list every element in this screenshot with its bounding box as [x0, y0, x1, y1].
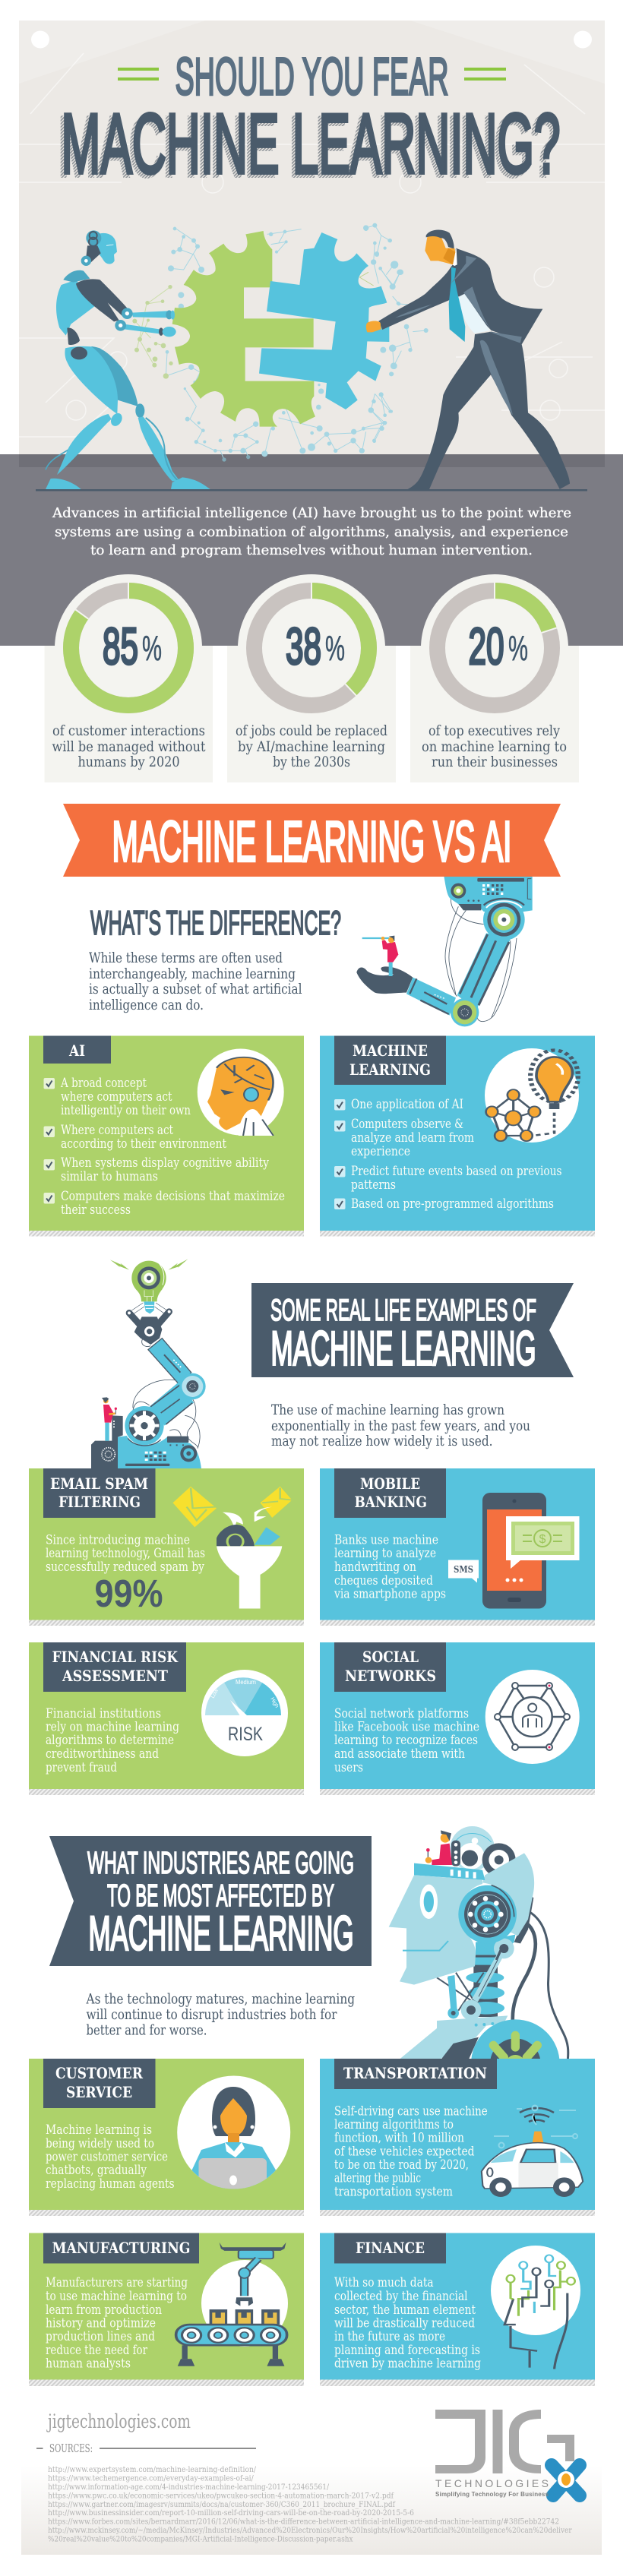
- finance text: will be drastically reduced: [334, 2315, 475, 2331]
- machine learning tab heading: [334, 1036, 446, 1085]
- ribbon heading: industries: WHAT INDUSTRIES ARE GOING: [87, 1845, 354, 1880]
- caption 38 percent: [236, 723, 387, 770]
- blue gear half: [259, 232, 389, 409]
- icon: robotic conveyor: [176, 2243, 288, 2366]
- icon: risk gauge: Low: [210, 1688, 220, 1699]
- manufacturing tab heading: [43, 2233, 199, 2264]
- stat card 38 percent: [227, 574, 396, 782]
- customer service tab heading: SERVICE: [66, 2083, 132, 2101]
- transportation text: Self-driving cars use machine: [334, 2104, 488, 2119]
- caption 85 percent: will be managed without: [52, 739, 206, 755]
- transportation tab heading: TRANSPORTATION: [343, 2064, 487, 2082]
- panel: manufacturing: [29, 2233, 304, 2386]
- caption 20 percent: on machine learning to: [422, 739, 567, 755]
- businessman pushing gear: [359, 223, 570, 489]
- AI checklist: A broad concept: [60, 1076, 147, 1090]
- sources heading: SOURCES:: [49, 2442, 93, 2455]
- icon: self-driving car: [482, 2106, 583, 2197]
- industries paragraph: will continue to disrupt industries both for: [87, 2007, 337, 2023]
- machine learning checklist: experience: [351, 1144, 410, 1158]
- panel: finance: [320, 2233, 595, 2386]
- intro text: [52, 505, 571, 558]
- finance text: collected by the financial: [334, 2289, 468, 2303]
- email spam tab heading: [43, 1468, 155, 1518]
- JIG Technologies logo: [435, 2410, 580, 2498]
- caption 38 percent: by AI/machine learning: [238, 739, 385, 755]
- transportation text: [334, 2104, 488, 2198]
- machine learning checklist: Computers observe &: [351, 1117, 463, 1131]
- machine learning checklist: One application of AI: [351, 1097, 463, 1111]
- panel: social networks: [320, 1642, 595, 1795]
- neural network decoration left: [132, 227, 403, 462]
- stat card 85 percent: [44, 574, 213, 782]
- sources list: http://www.businessinsider.com/report-10-million-self-driving-cars-will-be-on-the-road-by-2020-2015-5-6: [48, 2508, 414, 2518]
- caption 38 percent: of jobs could be replaced: [236, 723, 387, 739]
- intro text: to learn and program themselves without human intervention.: [90, 542, 533, 558]
- panel: customer service: [29, 2059, 304, 2216]
- financial risk tab heading: FINANCIAL RISK: [52, 1648, 179, 1666]
- caption 20 percent: [422, 723, 567, 770]
- machine learning checklist: Based on pre-programmed algorithms: [351, 1196, 554, 1211]
- social networks text: and associate them with: [334, 1746, 465, 1761]
- manufacturing text: [46, 2275, 188, 2371]
- machine learning checklist: analyze and learn from: [351, 1130, 474, 1145]
- AI checklist: When systems display cognitive ability: [61, 1155, 270, 1170]
- ribbon heading: industries: [49, 1836, 372, 1966]
- intro text: systems are using a combination of algorithms, analysis, and experience: [55, 524, 568, 540]
- manufacturing text: to use machine learning to: [46, 2289, 187, 2303]
- panel: machine learning: [320, 1036, 595, 1237]
- social networks tab heading: NETWORKS: [345, 1667, 436, 1685]
- manufacturing text: production lines and: [46, 2329, 155, 2344]
- email spam text: [46, 1533, 205, 1574]
- sources list: [48, 2465, 572, 2544]
- financial risk text: creditworthiness and: [46, 1746, 159, 1761]
- icon: risk gauge: [201, 1670, 288, 1756]
- sources list: https://www.pwc.co.uk/economic-services/ukeo/pwcukeo-section-4-automation-march-2017-v2.pdf: [48, 2492, 394, 2501]
- value 20 percent: 20: [468, 618, 504, 675]
- ribbon heading: real life examples: [251, 1283, 574, 1377]
- social networks text: [334, 1706, 479, 1775]
- customer service text: power customer service: [46, 2150, 168, 2164]
- caption 85 percent: humans by 2020: [77, 754, 179, 770]
- manufacturing text: reduce the need for: [46, 2343, 147, 2357]
- value 85 percent: %: [142, 628, 162, 668]
- mobile banking text: learning to analyze: [334, 1546, 436, 1560]
- difference paragraph: While these terms are often used: [89, 950, 283, 966]
- customer service text: replacing human agents: [46, 2176, 175, 2191]
- financial risk text: algorithms to determine: [46, 1733, 174, 1747]
- title decoration right: [464, 68, 506, 81]
- mobile banking text: handwriting on: [334, 1560, 416, 1574]
- transportation text: transportation system: [334, 2185, 453, 2198]
- social networks tab heading: SOCIAL: [362, 1648, 419, 1666]
- AI checklist: similar to humans: [61, 1169, 158, 1184]
- email spam tab heading: EMAIL SPAM: [50, 1474, 148, 1493]
- value 85 percent: 85: [103, 618, 138, 675]
- sources list: http://www.expertsystem.com/machine-learning-definition/: [48, 2465, 256, 2474]
- grey intro band: [0, 454, 623, 646]
- mobile banking tab heading: BANKING: [354, 1493, 427, 1511]
- AI tab heading: AI: [68, 1041, 85, 1060]
- financial risk tab heading: [43, 1642, 186, 1692]
- finance text: planning and forecasting is: [334, 2343, 480, 2357]
- finance text: in the future as more: [334, 2329, 445, 2344]
- hero panel: [19, 21, 605, 469]
- panel: mobile banking: [320, 1468, 595, 1626]
- examples paragraph: The use of machine learning has grown: [271, 1402, 504, 1418]
- caption 20 percent: of top executives rely: [429, 723, 560, 739]
- title: [58, 47, 561, 194]
- AI checklist: intelligently on their own: [61, 1103, 191, 1117]
- title decoration left: [118, 68, 159, 81]
- manufacturing text: history and optimize: [46, 2315, 156, 2331]
- mobile banking text: via smartphone apps: [334, 1587, 446, 1601]
- robot arm holding person illustration: [356, 876, 533, 1026]
- industries paragraph: better and for worse.: [87, 2023, 207, 2039]
- finance text: With so much data: [334, 2275, 434, 2290]
- customer service text: Machine learning is: [46, 2122, 152, 2137]
- caption 20 percent: run their businesses: [432, 754, 558, 770]
- ground line: [36, 489, 587, 491]
- robot head illustration: [389, 1826, 568, 2108]
- green gear half: [172, 231, 315, 427]
- stat card 20 percent: [410, 574, 579, 782]
- finance tab heading: [334, 2233, 446, 2264]
- difference paragraph: interchangeably, machine learning: [89, 966, 296, 982]
- customer service text: [46, 2122, 175, 2191]
- robot pulling gear: [46, 230, 210, 489]
- machine learning checklist: [334, 1097, 562, 1211]
- icon: smartphone with banknote: SMS: [454, 1564, 473, 1575]
- JIG Technologies logo: Simplifying Technology For Business: [435, 2491, 549, 2498]
- AI checklist: where computers act: [61, 1089, 172, 1104]
- sources list: http://www.information-age.com/4-industries-machine-learning-2017-123465561/: [48, 2483, 329, 2492]
- email spam tab heading: FILTERING: [59, 1493, 141, 1511]
- heading: what's the difference: WHAT'S THE DIFFERENCE?: [90, 905, 341, 942]
- icon: AI head: [198, 1048, 284, 1136]
- financial risk tab heading: ASSESSMENT: [62, 1667, 168, 1685]
- manufacturing tab heading: MANUFACTURING: [52, 2239, 190, 2257]
- value 99 percent: 99%: [94, 1572, 163, 1615]
- social networks text: users: [334, 1760, 363, 1775]
- icon: circuit head: [491, 2246, 580, 2369]
- financial risk text: prevent fraud: [46, 1760, 117, 1775]
- machine learning tab heading: MACHINE: [353, 1041, 428, 1060]
- value 20 percent: %: [508, 628, 528, 668]
- panel: AI: [29, 1036, 304, 1237]
- difference paragraph: [89, 950, 302, 1013]
- email spam text: Since introducing machine: [46, 1533, 190, 1547]
- footer background: [21, 2465, 602, 2555]
- caption 85 percent: of customer interactions: [52, 723, 205, 739]
- AI checklist: [44, 1076, 285, 1217]
- mobile banking text: cheques deposited: [334, 1573, 433, 1588]
- examples paragraph: exponentially in the past few years, and you: [271, 1418, 530, 1434]
- customer service text: chatbots, gradually: [46, 2163, 147, 2177]
- machine learning tab heading: LEARNING: [349, 1060, 431, 1079]
- machine learning checklist: Predict future events based on previous: [351, 1164, 562, 1178]
- financial risk text: rely on machine learning: [46, 1720, 179, 1734]
- transportation text: function, with 10 million: [334, 2131, 464, 2145]
- manufacturing text: human analysts: [46, 2356, 131, 2371]
- finance text: driven by machine learning: [334, 2356, 481, 2371]
- caption 85 percent: [52, 723, 206, 770]
- transportation text: altering the public: [334, 2171, 421, 2186]
- icon: risk gauge: High: [269, 1697, 280, 1709]
- donut chart 85 percent: [71, 583, 185, 705]
- manufacturing text: learn from production: [46, 2303, 162, 2317]
- industries paragraph: As the technology matures, machine learning: [86, 1992, 355, 2007]
- customer service text: being widely used to: [46, 2136, 154, 2151]
- donut chart 38 percent: [254, 583, 369, 705]
- ribbon heading: industries: TO BE MOST AFFECTED BY: [107, 1878, 334, 1913]
- manufacturing text: Manufacturers are starting: [46, 2275, 188, 2290]
- difference paragraph: intelligence can do.: [89, 997, 204, 1013]
- difference paragraph: is actually a subset of what artificial: [89, 981, 302, 997]
- intro text: Advances in artificial intelligence (AI) have brought us to the point where: [52, 505, 571, 521]
- mobile banking text: [334, 1533, 446, 1601]
- ribbon heading: industries: MACHINE LEARNING: [88, 1907, 354, 1960]
- customer service tab heading: CUSTOMER: [55, 2064, 143, 2082]
- panel: transportation: [320, 2059, 595, 2216]
- industries paragraph: [86, 1992, 355, 2039]
- value 38 percent: 38: [286, 618, 321, 675]
- transportation text: learning algorithms to: [334, 2117, 454, 2132]
- finance text: sector, the human element: [334, 2303, 476, 2317]
- panel: email spam filtering: [29, 1468, 304, 1626]
- icon: risk gauge: Medium: [236, 1679, 256, 1686]
- icon: risk gauge: RISK: [228, 1724, 263, 1745]
- social networks text: learning to recognize faces: [334, 1733, 478, 1747]
- email spam text: learning technology, Gmail has: [46, 1546, 205, 1560]
- icon: spam funnel: [172, 1487, 292, 1608]
- JIG Technologies logo: TECHNOLOGIES: [435, 2477, 549, 2489]
- sources list: %20real%20value%20to%20companies/MGI-Artificial-Intelligence-Discussion-paper.ashx: [48, 2535, 353, 2544]
- social networks text: like Facebook use machine: [334, 1720, 479, 1734]
- transportation text: to be on the road by 2020,: [334, 2157, 469, 2172]
- sources list: https://www.gartner.com/imagesrv/summits/docs/na/customer-360/C360_2011_brochure_FINAL.pdf: [48, 2500, 396, 2509]
- examples paragraph: [271, 1402, 530, 1449]
- AI checklist: according to their environment: [61, 1136, 226, 1151]
- AI checklist: Computers make decisions that maximize: [61, 1189, 285, 1203]
- financial risk text: [46, 1706, 179, 1775]
- machine learning checklist: patterns: [351, 1177, 396, 1192]
- finance tab heading: FINANCE: [356, 2239, 425, 2257]
- financial risk text: Financial institutions: [46, 1706, 161, 1721]
- robot arm with light bulb illustration: [91, 1259, 206, 1468]
- mobile banking text: Banks use machine: [334, 1533, 438, 1547]
- icon: bulb and network: [485, 1048, 579, 1143]
- AI tab heading: [43, 1036, 111, 1064]
- icon: customer service agent: [177, 2075, 290, 2189]
- mobile banking tab heading: [334, 1468, 446, 1518]
- split gear illustration: [172, 231, 389, 427]
- social networks tab heading: [334, 1642, 446, 1692]
- customer service tab heading: [43, 2059, 155, 2108]
- finance text: [334, 2275, 481, 2371]
- mobile banking tab heading: MOBILE: [360, 1474, 420, 1493]
- social networks text: Social network platforms: [334, 1706, 469, 1721]
- examples paragraph: may not realize how widely it is used.: [271, 1433, 492, 1449]
- transportation tab heading: [334, 2059, 497, 2089]
- donut chart 20 percent: [438, 583, 557, 705]
- icon: social network: [485, 1670, 580, 1764]
- AI checklist: their success: [61, 1203, 131, 1217]
- sources list: https://www.techemergence.com/everyday-examples-of-ai/: [48, 2474, 254, 2483]
- website address: jigtechnologies.com: [46, 2410, 191, 2432]
- icon: smartphone with banknote: $: [539, 1533, 546, 1546]
- email spam text: successfully reduced spam by: [46, 1560, 205, 1574]
- transportation text: of these vehicles expected: [334, 2145, 475, 2159]
- AI checklist: Where computers act: [61, 1123, 173, 1137]
- panel: financial risk assessment: [29, 1642, 304, 1795]
- caption 38 percent: by the 2030s: [273, 754, 350, 770]
- value 38 percent: %: [325, 628, 345, 668]
- icon: smartphone with banknote: [448, 1493, 579, 1609]
